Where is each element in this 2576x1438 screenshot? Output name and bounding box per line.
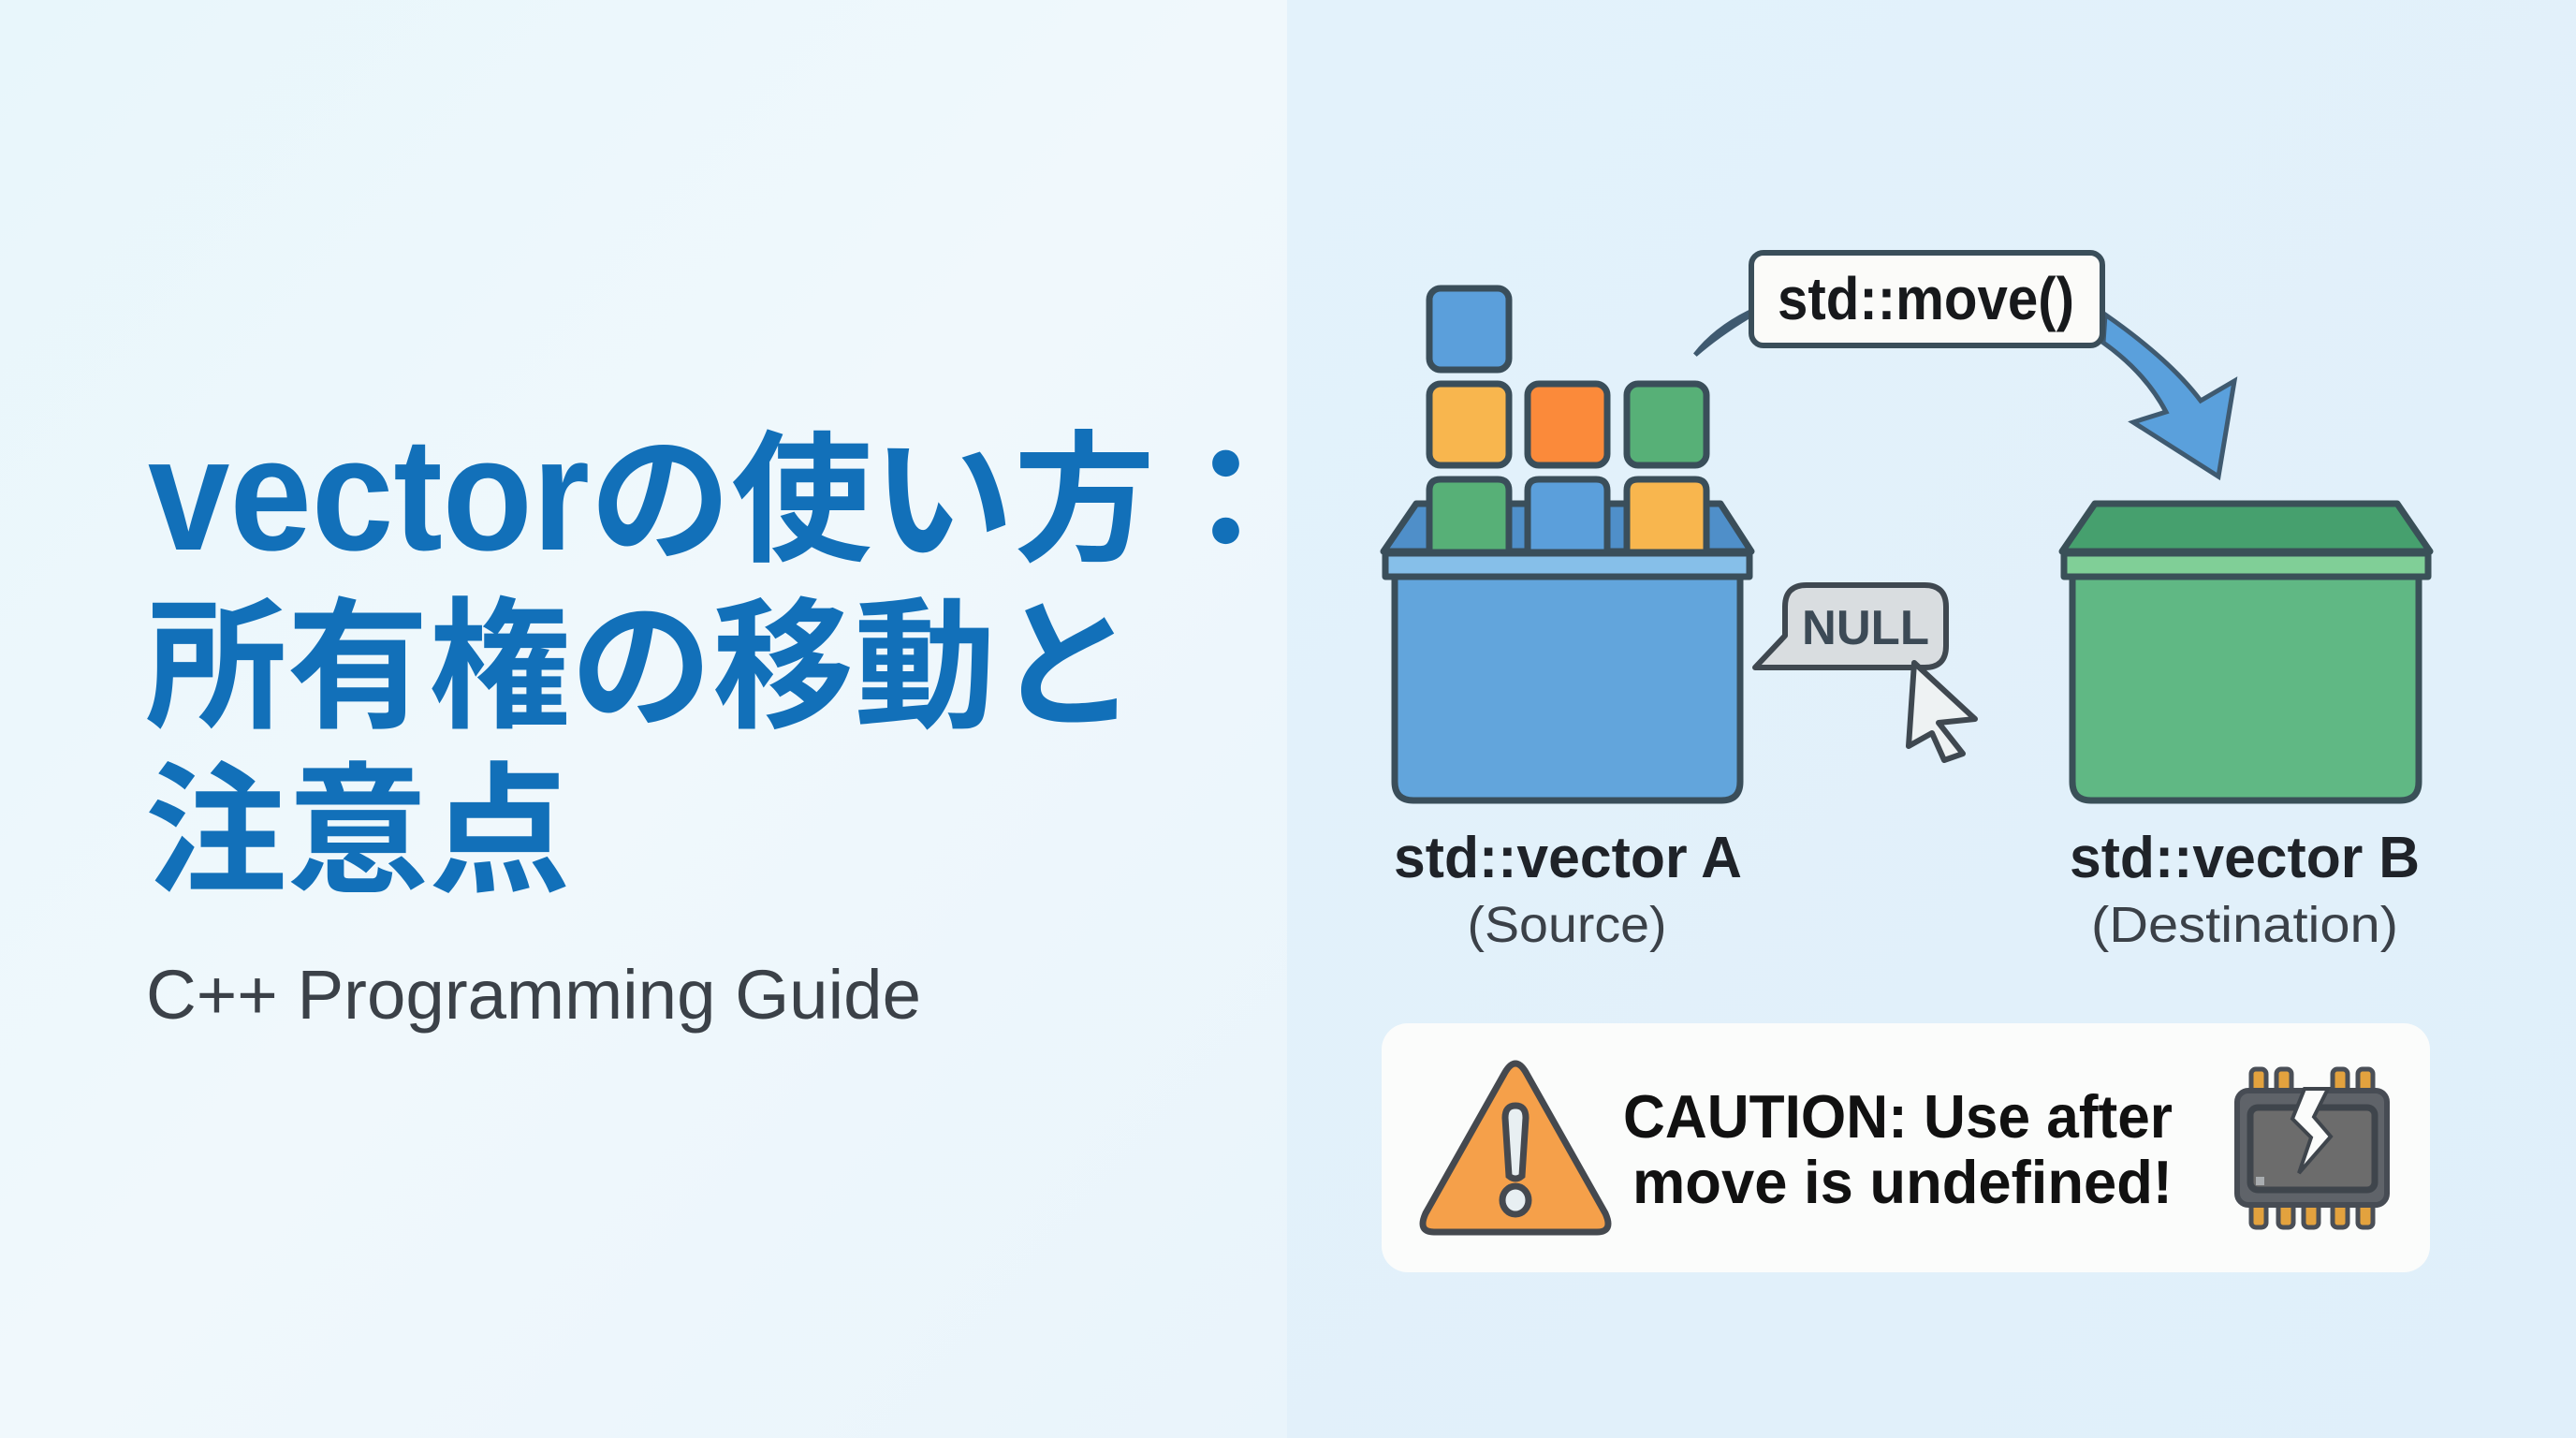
label: std::move() bbox=[1751, 253, 2102, 345]
label: std::vector B bbox=[2070, 826, 2420, 953]
title bbox=[145, 404, 1296, 912]
callout: NULL bubble bbox=[1755, 585, 1946, 668]
icon: cursor bbox=[1909, 663, 1975, 760]
caution text bbox=[1623, 1082, 2173, 1216]
caution text: move is undefined! bbox=[1632, 1148, 2173, 1216]
illustration: source vector A bin with blocks bbox=[1383, 288, 1751, 800]
title: の使い方： bbox=[590, 421, 1296, 580]
label: std::vector A: std::vector A bbox=[1394, 826, 1742, 890]
subtitle: C++ Programming Guide bbox=[146, 956, 921, 1034]
block stack bbox=[1429, 288, 1706, 552]
label: std::vector B: std::vector B bbox=[2070, 826, 2420, 890]
title: vector bbox=[148, 404, 590, 584]
bin A rim bbox=[1385, 553, 1749, 577]
callout: NULL bubble: NULL bbox=[1802, 601, 1929, 655]
caution text: CAUTION: Use after bbox=[1623, 1082, 2173, 1151]
bin A body bbox=[1395, 575, 1740, 800]
title: 注意点 bbox=[145, 754, 571, 912]
title: 所有権の移動と bbox=[145, 589, 1138, 747]
icon: broken chip bbox=[2237, 1069, 2387, 1227]
label: std::move(): std::move() bbox=[1778, 265, 2074, 332]
panel: caution bbox=[1382, 1023, 2430, 1272]
label: std::vector A bbox=[1394, 826, 1742, 953]
icon: warning triangle bbox=[1423, 1064, 1608, 1232]
label: std::vector B: (Destination) bbox=[2091, 897, 2398, 953]
illustration: destination vector B bin bbox=[2062, 504, 2430, 800]
bin A back flap bbox=[1383, 504, 1751, 551]
arrow: move from A to B bbox=[1695, 313, 2234, 477]
label: std::vector A: (Source) bbox=[1468, 897, 1666, 953]
